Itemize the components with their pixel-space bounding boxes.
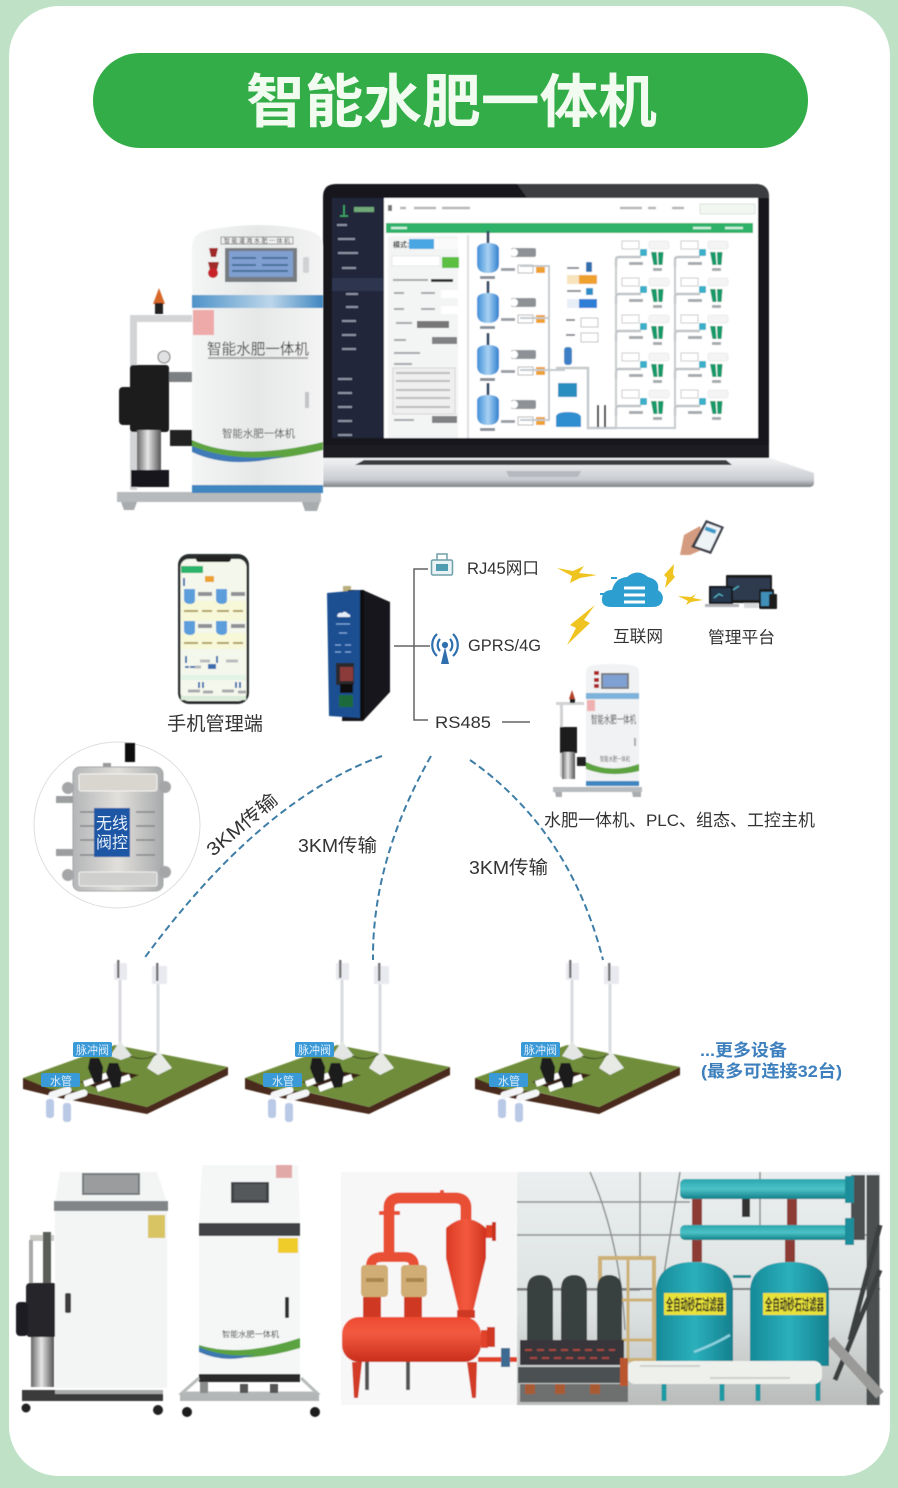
- title banner: 智能水肥一体机: [246, 70, 657, 135]
- laptop with dashboard: [323, 184, 814, 487]
- phone label: 手机管理端: [167, 713, 263, 735]
- pump: [119, 351, 193, 487]
- icon: GPRS antenna: [432, 634, 458, 664]
- small fertigation machine: 智能水肥一体机: [591, 713, 636, 726]
- label: management platform: 管理平台: [708, 628, 775, 647]
- label: RS485: RS485: [435, 713, 491, 732]
- circle outline: [34, 742, 200, 908]
- teal tanks: [656, 1262, 733, 1366]
- tank labels: [664, 1293, 726, 1315]
- field scene 2: 水管: [272, 1074, 294, 1088]
- arrow: wireless link centre: [373, 756, 431, 960]
- product: machine A: [16, 1172, 168, 1415]
- label: machine types: 水肥一体机、PLC、组态、工控主机: [544, 811, 815, 830]
- photo: sand media filters in greenhouse: 全自动砂石过滤器: [666, 1295, 724, 1314]
- label: 3KM rotated: 3KM传输: [202, 789, 281, 860]
- icon: management platform devices: [705, 575, 777, 609]
- dashboard screen: [332, 198, 758, 438]
- title banner: [93, 53, 808, 148]
- photo: sand media filters in greenhouse: 全自动砂石过滤器: [765, 1295, 824, 1314]
- small fertigation machine: [553, 664, 642, 797]
- more devices note: ...更多设备: [700, 1040, 787, 1060]
- field scene 1: 脉冲阀: [76, 1043, 109, 1057]
- machine frame and base: [130, 315, 192, 490]
- arrow: lightning cloud to phone: [664, 564, 675, 588]
- label: 3KM centre: 3KM传输: [298, 835, 377, 856]
- arrow: wireless link left: [143, 756, 382, 960]
- machine cabinet: 智能水肥一体机: [207, 340, 309, 358]
- phone management client: [167, 554, 263, 735]
- controller label: 无线: [96, 814, 128, 833]
- field scene 2: [245, 960, 450, 1122]
- arrow: lightning GPRS to cloud: [567, 605, 595, 645]
- warning beacon: [153, 288, 165, 304]
- dashboard screen: 模式:: [393, 240, 409, 249]
- field scene 1: [23, 960, 228, 1122]
- machine cabinet: [192, 225, 323, 493]
- right dark pipes: [851, 1175, 865, 1240]
- machine cabinet: 智能水肥一体机: [222, 427, 295, 440]
- controller box: [56, 743, 171, 891]
- dashboard tanks: [477, 231, 545, 279]
- wireless valve controller: 阀控: [96, 833, 128, 852]
- field scene 2: 脉冲阀: [298, 1043, 331, 1057]
- laptop lid: [323, 184, 769, 458]
- more devices note: (最多可连接32台): [701, 1061, 842, 1081]
- photo: sand media filters in greenhouse: [517, 1172, 880, 1405]
- field scene 1: 水管: [50, 1074, 72, 1088]
- arrow: lightning RJ45 to cloud: [557, 566, 597, 583]
- field scene 3: 脉冲阀: [524, 1043, 557, 1057]
- icon: phone in hand: [680, 520, 724, 555]
- gateway device: [327, 586, 390, 721]
- dashboard valve rows: [616, 241, 669, 271]
- field scene 3: [475, 960, 680, 1122]
- white wrapped pipe: [694, 1335, 730, 1352]
- laptop base: [323, 458, 814, 487]
- product: machine B: [180, 1165, 320, 1417]
- connection bracket: [394, 569, 530, 722]
- icon: RJ45 port: [432, 554, 452, 575]
- label: internet: 互联网: [613, 627, 663, 646]
- arrow: wireless link right: [470, 760, 603, 960]
- fertigation machine: [117, 225, 323, 511]
- label: RJ45: RJ45网口: [467, 559, 539, 578]
- phone: [178, 554, 249, 704]
- field scene 3: 水管: [498, 1074, 520, 1088]
- arrow: lightning cloud to platform: [678, 594, 703, 605]
- teal manifold pipes: [680, 1179, 851, 1199]
- small fertigation machine: 智能水肥一体机: [600, 754, 630, 763]
- photo: red sand separator filter: [341, 1172, 517, 1405]
- more devices note: [700, 1040, 842, 1081]
- black disc filters: [527, 1275, 622, 1340]
- label: GPRS/4G: GPRS/4G: [468, 636, 541, 655]
- wireless valve controller: [34, 742, 200, 908]
- product: machine B: 智能水肥一体机: [222, 1329, 279, 1339]
- icon: cloud: [600, 572, 663, 607]
- machine cabinet: 智能灌溉水肥一体机: [224, 237, 290, 245]
- label: 3KM right: 3KM传输: [469, 857, 548, 878]
- wooden frame: [600, 1258, 654, 1360]
